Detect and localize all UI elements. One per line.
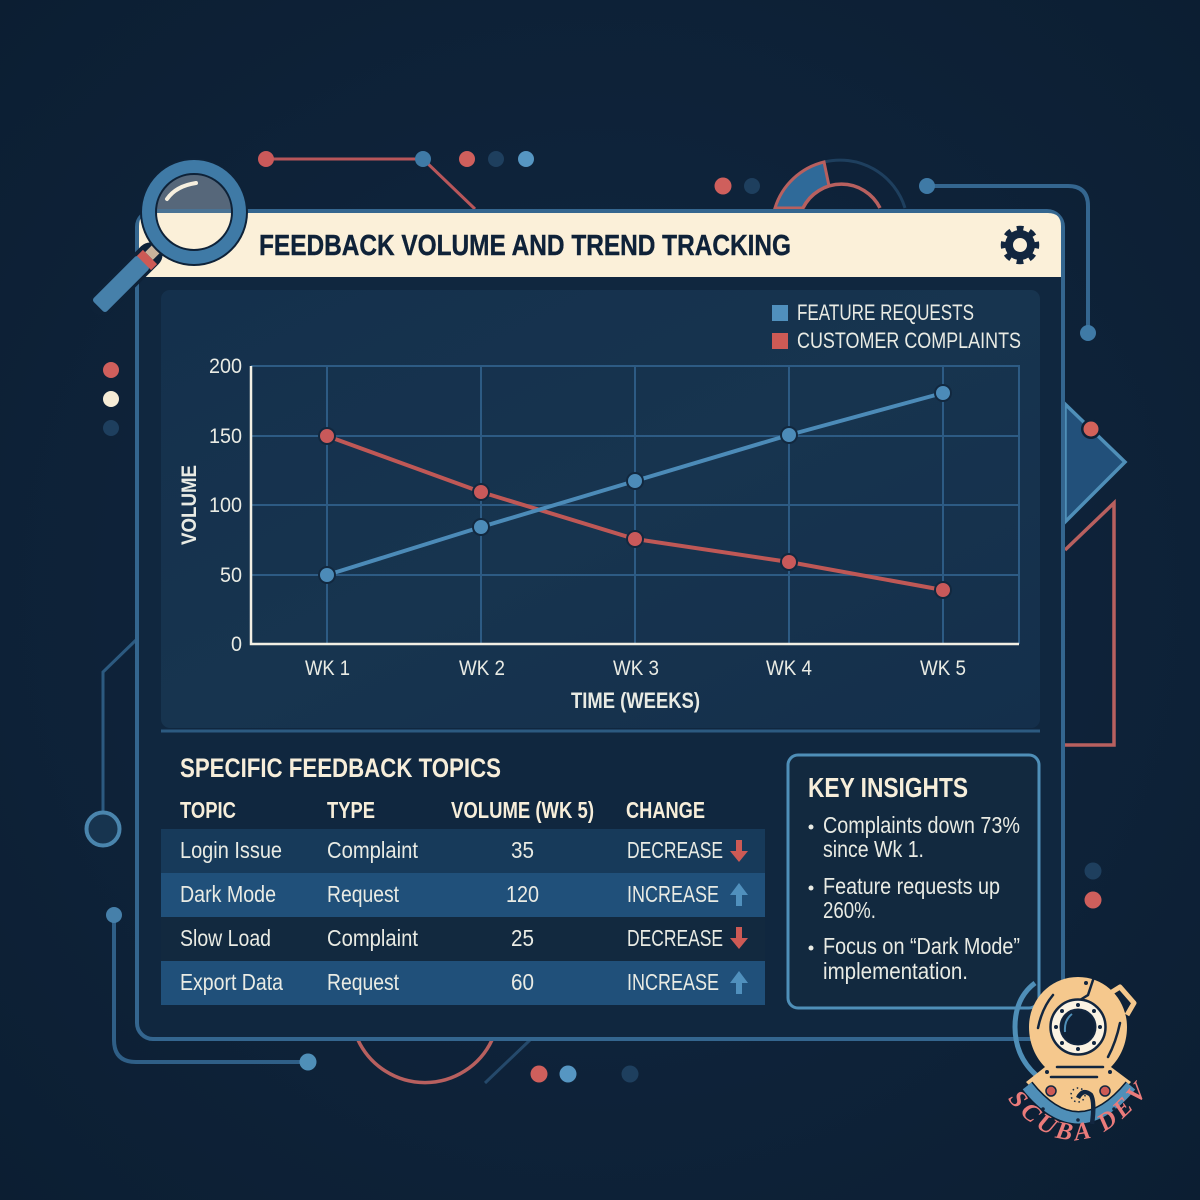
x axis labels bbox=[305, 657, 966, 680]
insight 3: implementation. bbox=[823, 958, 968, 984]
header bar bbox=[139, 213, 1061, 277]
row: login issue: Complaint bbox=[327, 837, 419, 863]
row: slow load bbox=[161, 917, 765, 961]
lower left connector bbox=[106, 907, 316, 1070]
collar bolts bbox=[1041, 1107, 1116, 1122]
legend: CUSTOMER COMPLAINTS bbox=[797, 328, 1021, 353]
x axis labels: WK 3 bbox=[613, 657, 659, 680]
top dot row bbox=[459, 151, 534, 167]
series: customer complaints bbox=[319, 428, 951, 598]
legend bbox=[772, 300, 1021, 353]
helmet seam lines bbox=[1038, 980, 1120, 1077]
y axis labels: 100 bbox=[209, 494, 242, 517]
legend: FEATURE REQUESTS bbox=[797, 300, 974, 325]
helmet rivets bbox=[1045, 981, 1112, 1074]
bottom red arc bbox=[358, 1040, 492, 1083]
row: slow load: DECREASE bbox=[627, 925, 723, 951]
table header row: TOPIC bbox=[180, 797, 236, 823]
left ring connector bbox=[86, 640, 136, 846]
decorative circuit lines and dots around the dashboard bbox=[86, 151, 1125, 1083]
left vertical dots bbox=[103, 362, 119, 436]
insights heading: KEY INSIGHTS bbox=[808, 772, 968, 803]
row: export data: INCREASE bbox=[627, 969, 719, 995]
insight 3: Focus on “Dark Mode” bbox=[823, 933, 1020, 959]
title: FEEDBACK VOLUME AND TREND TRACKING bbox=[259, 230, 791, 262]
blue back arc bbox=[1015, 983, 1036, 1075]
helmet body bbox=[1026, 977, 1131, 1111]
insight 2: Feature requests up bbox=[823, 873, 1000, 899]
y axis labels: 150 bbox=[209, 425, 242, 448]
top right dots bbox=[714, 178, 760, 194]
insight 1: since Wk 1. bbox=[823, 836, 924, 862]
table header row: TYPE bbox=[327, 797, 375, 823]
chart axes bbox=[251, 366, 1019, 644]
x axis labels: WK 4 bbox=[766, 657, 812, 680]
insight 2: 260%. bbox=[823, 897, 876, 923]
series: feature requests bbox=[319, 385, 951, 583]
bottom dots bbox=[530, 1066, 638, 1082]
row: slow load: Slow Load bbox=[180, 925, 271, 951]
row: login issue: DECREASE bbox=[627, 837, 723, 863]
collar bbox=[1027, 1086, 1131, 1118]
top handle bbox=[1112, 987, 1134, 1015]
row: dark mode: Request bbox=[327, 881, 400, 907]
row: dark mode: Dark Mode bbox=[180, 881, 276, 907]
x axis labels: WK 1 bbox=[305, 657, 350, 680]
main dashboard panel bbox=[137, 211, 1063, 1039]
x axis title: TIME (WEEKS) bbox=[571, 688, 700, 713]
donut gauge behind header bbox=[775, 160, 905, 208]
row: export data bbox=[161, 961, 765, 1005]
logo: scuba dev diving helmet bbox=[1008, 977, 1142, 1141]
row: dark mode: INCREASE bbox=[627, 881, 719, 907]
table header row: CHANGE bbox=[626, 797, 705, 823]
row: slow load: Complaint bbox=[327, 925, 419, 951]
table header row: VOLUME (WK 5) bbox=[451, 797, 594, 823]
row: dark mode: 120 bbox=[506, 881, 539, 907]
porthole bbox=[1050, 1000, 1106, 1054]
chart grid bbox=[251, 366, 1019, 644]
handle bbox=[96, 245, 160, 309]
right triangle with dot bbox=[1065, 404, 1125, 522]
y axis labels: 200 bbox=[209, 355, 242, 378]
insight 1 bbox=[808, 812, 1020, 862]
y axis labels: 50 bbox=[220, 564, 242, 587]
x axis labels: WK 2 bbox=[459, 657, 505, 680]
panel: key insights bbox=[788, 755, 1039, 1008]
table header row bbox=[180, 797, 705, 823]
insight 3 bbox=[808, 933, 1020, 984]
table heading: SPECIFIC FEEDBACK TOPICS bbox=[180, 753, 501, 783]
top right connector bbox=[919, 178, 1096, 341]
row: login issue bbox=[161, 829, 765, 873]
icon: gear bbox=[1004, 228, 1036, 262]
y axis title: VOLUME bbox=[178, 465, 201, 545]
row: dark mode bbox=[161, 873, 765, 917]
panel: feedback topics table bbox=[161, 753, 765, 1005]
icon: magnifying glass bbox=[96, 158, 248, 309]
row: login issue: 35 bbox=[511, 837, 534, 863]
right red bracket bbox=[1065, 503, 1114, 745]
insight 2 bbox=[808, 873, 1000, 923]
row: slow load: 25 bbox=[511, 925, 534, 951]
top left connector bbox=[258, 151, 475, 209]
collar details bbox=[1046, 1086, 1110, 1124]
y axis labels bbox=[209, 355, 242, 656]
row: export data: Request bbox=[327, 969, 400, 995]
insight 1: Complaints down 73% bbox=[823, 812, 1020, 838]
row: export data: Export Data bbox=[180, 969, 283, 995]
logo wordmark: SCUBA DEV bbox=[1008, 1080, 1142, 1141]
bottom diagonal line bbox=[485, 1040, 530, 1083]
right side dots bbox=[1084, 862, 1102, 908]
row: export data: 60 bbox=[511, 969, 534, 995]
row: login issue: Login Issue bbox=[180, 837, 282, 863]
y axis labels: 0 bbox=[231, 633, 242, 656]
x axis labels: WK 5 bbox=[920, 657, 966, 680]
panel: line chart bbox=[161, 290, 1040, 728]
